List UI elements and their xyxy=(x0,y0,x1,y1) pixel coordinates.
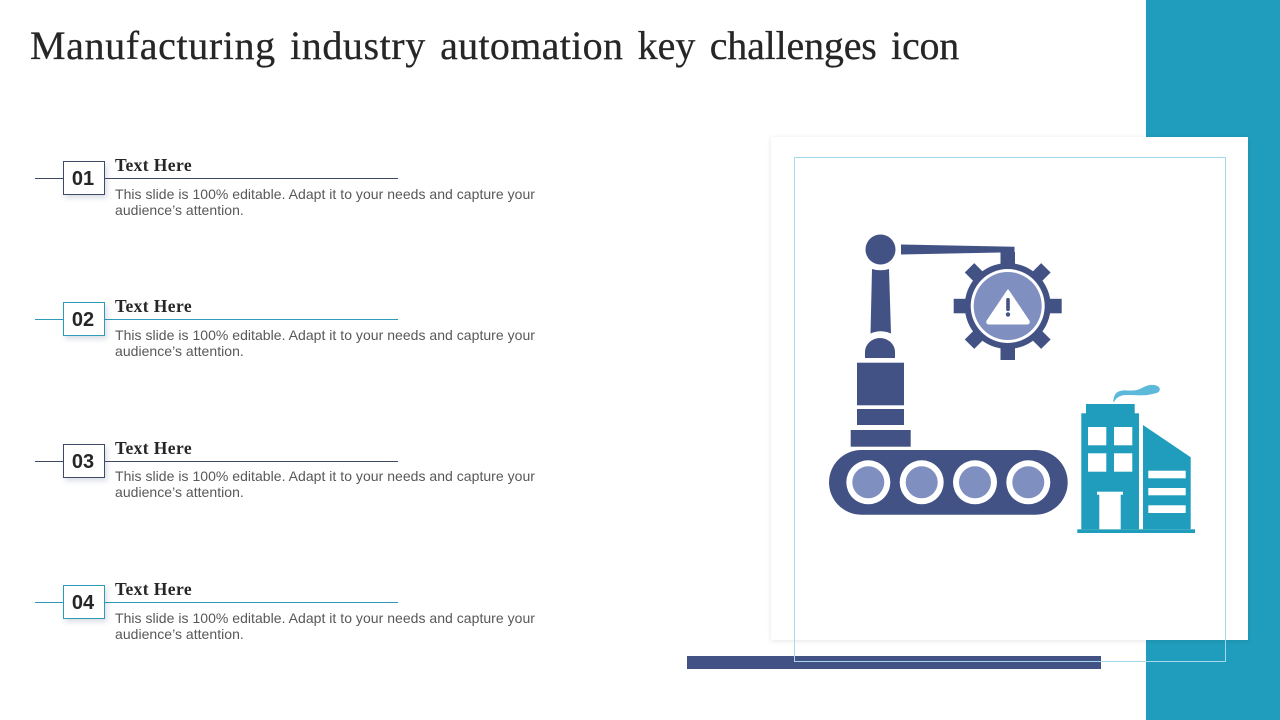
number box 01: 01 xyxy=(72,168,94,190)
heading 02: Text Here xyxy=(115,296,192,316)
heading 04: Text Here xyxy=(115,579,192,599)
number box 04: 04 xyxy=(72,592,94,614)
title: Manufacturing industry automation key challenges icon xyxy=(30,23,959,68)
icon: warning gear xyxy=(954,252,1062,360)
conveyor rollers xyxy=(846,460,1050,504)
item 04 xyxy=(35,579,535,642)
panel: icon card xyxy=(771,137,1248,640)
icon: factory building xyxy=(1077,385,1195,533)
icon: conveyor belt xyxy=(829,450,1068,515)
item 03 xyxy=(35,438,535,500)
navy accent bar xyxy=(687,656,1101,669)
connector line 04 xyxy=(35,602,398,603)
number box 02 xyxy=(63,302,105,336)
thin frame outline xyxy=(794,157,1226,662)
description 04: This slide is 100% editable. Adapt it to your needs and capture your audience’s attention. xyxy=(115,610,535,642)
heading 03: Text Here xyxy=(115,438,192,458)
description 01: This slide is 100% editable. Adapt it to your needs and capture your audience’s attention. xyxy=(115,186,535,218)
icon: robotic arm xyxy=(851,234,1014,447)
connector line 01 xyxy=(35,178,398,179)
item 01 xyxy=(35,155,535,218)
icon: smoke xyxy=(1113,385,1160,402)
description 02: This slide is 100% editable. Adapt it to your needs and capture your audience’s attention. xyxy=(115,327,535,359)
teal side band xyxy=(1146,0,1280,720)
description 03: This slide is 100% editable. Adapt it to your needs and capture your audience’s attention. xyxy=(115,468,535,500)
number box 03: 03 xyxy=(72,451,94,473)
number box 04 xyxy=(63,585,105,619)
heading 01: Text Here xyxy=(115,155,192,175)
number box 03 xyxy=(63,444,105,478)
number box 02: 02 xyxy=(72,309,94,331)
connector line 02 xyxy=(35,319,398,320)
number box 01 xyxy=(63,161,105,195)
connector line 03 xyxy=(35,461,398,462)
item 02 xyxy=(35,296,535,359)
